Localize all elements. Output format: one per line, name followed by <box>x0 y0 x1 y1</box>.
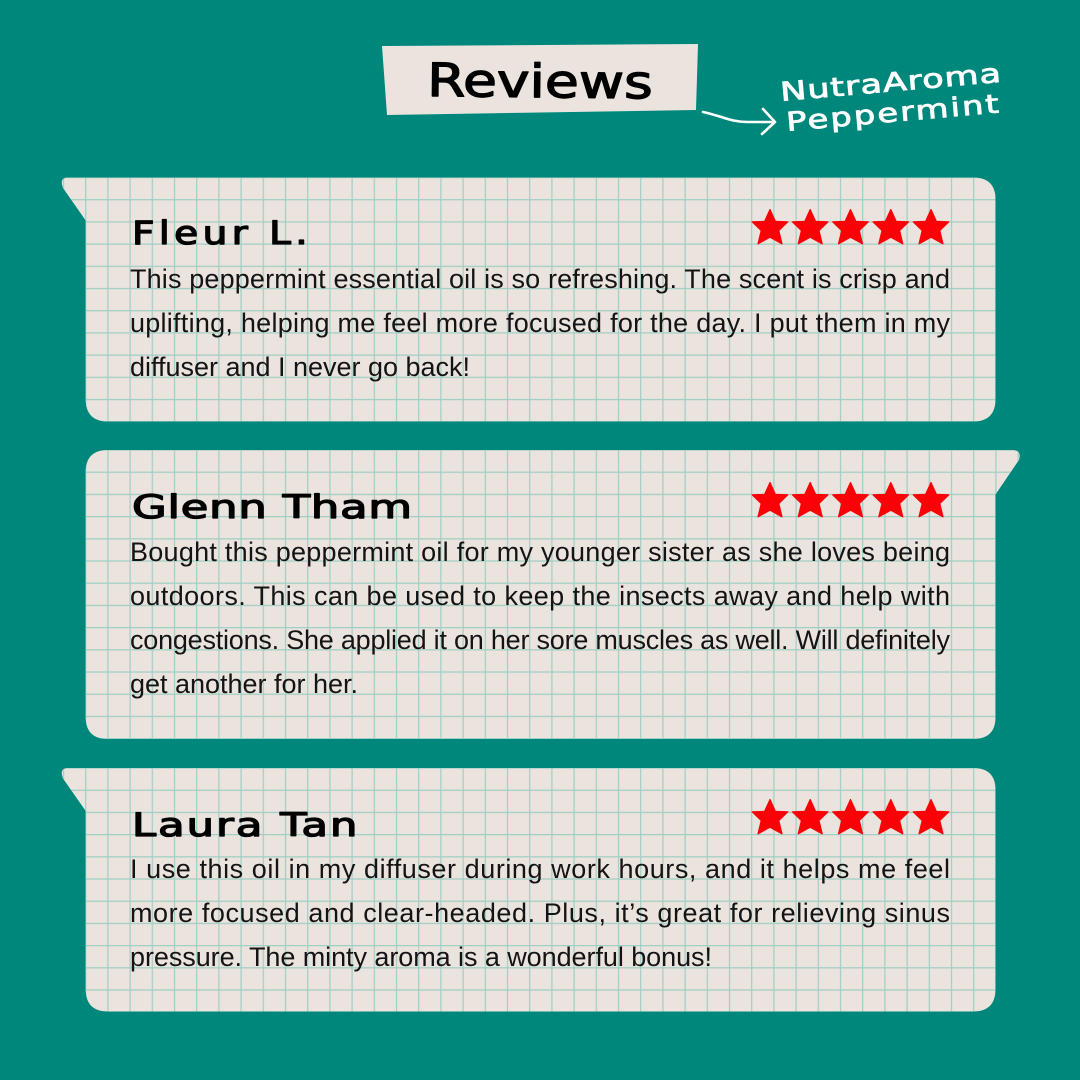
panel: review Laura Tan <box>62 768 996 1012</box>
review text <box>130 264 950 382</box>
speech bubble card <box>62 768 996 1012</box>
review text: uplifting, helping me feel more focused for the day. I put them in my <box>130 308 950 338</box>
grid paper <box>62 178 996 422</box>
speech bubble card <box>62 178 996 422</box>
star rating <box>752 800 949 834</box>
star rating <box>752 482 949 517</box>
speech bubble card <box>86 450 1020 739</box>
review text: Bought this peppermint oil for my younger sister as she loves being <box>130 537 950 567</box>
review text: pressure. The minty aroma is a wonderful bonus! <box>130 942 712 972</box>
grid paper <box>62 768 996 1012</box>
note line: Peppermint: Peppermint <box>785 89 1000 138</box>
review text: diffuser and I never go back! <box>130 352 470 382</box>
review text: outdoors. This can be used to keep the insects away and help with <box>130 581 950 611</box>
arrow to product name <box>703 109 775 134</box>
review text: I use this oil in my diffuser during work hours, and it helps me feel <box>130 854 950 884</box>
note line: NutraAroma: NutraAroma <box>779 58 1002 108</box>
review text: get another for her. <box>130 669 358 699</box>
review text <box>130 537 950 699</box>
review text: more focused and clear-headed. Plus, it’s great for relieving sinus <box>130 898 950 928</box>
panel: review Fleur L. <box>62 178 996 422</box>
product name note <box>779 58 1002 138</box>
heading: Reviews: Reviews <box>427 53 653 109</box>
panel: review Glenn Tham <box>86 450 1020 739</box>
reviewer name: Fleur L. <box>132 215 308 252</box>
review text: congestions. She applied it on her sore muscles as well. Will definitely <box>130 625 950 655</box>
reviewer name: Glenn Tham <box>132 489 412 526</box>
reviewer name: Laura Tan <box>132 807 357 844</box>
title label background <box>382 44 698 115</box>
grid paper <box>86 450 1020 739</box>
star rating <box>752 210 949 244</box>
review text: This peppermint essential oil is so refreshing. The scent is crisp and <box>130 264 950 294</box>
review text <box>130 854 950 972</box>
title block <box>382 44 698 115</box>
